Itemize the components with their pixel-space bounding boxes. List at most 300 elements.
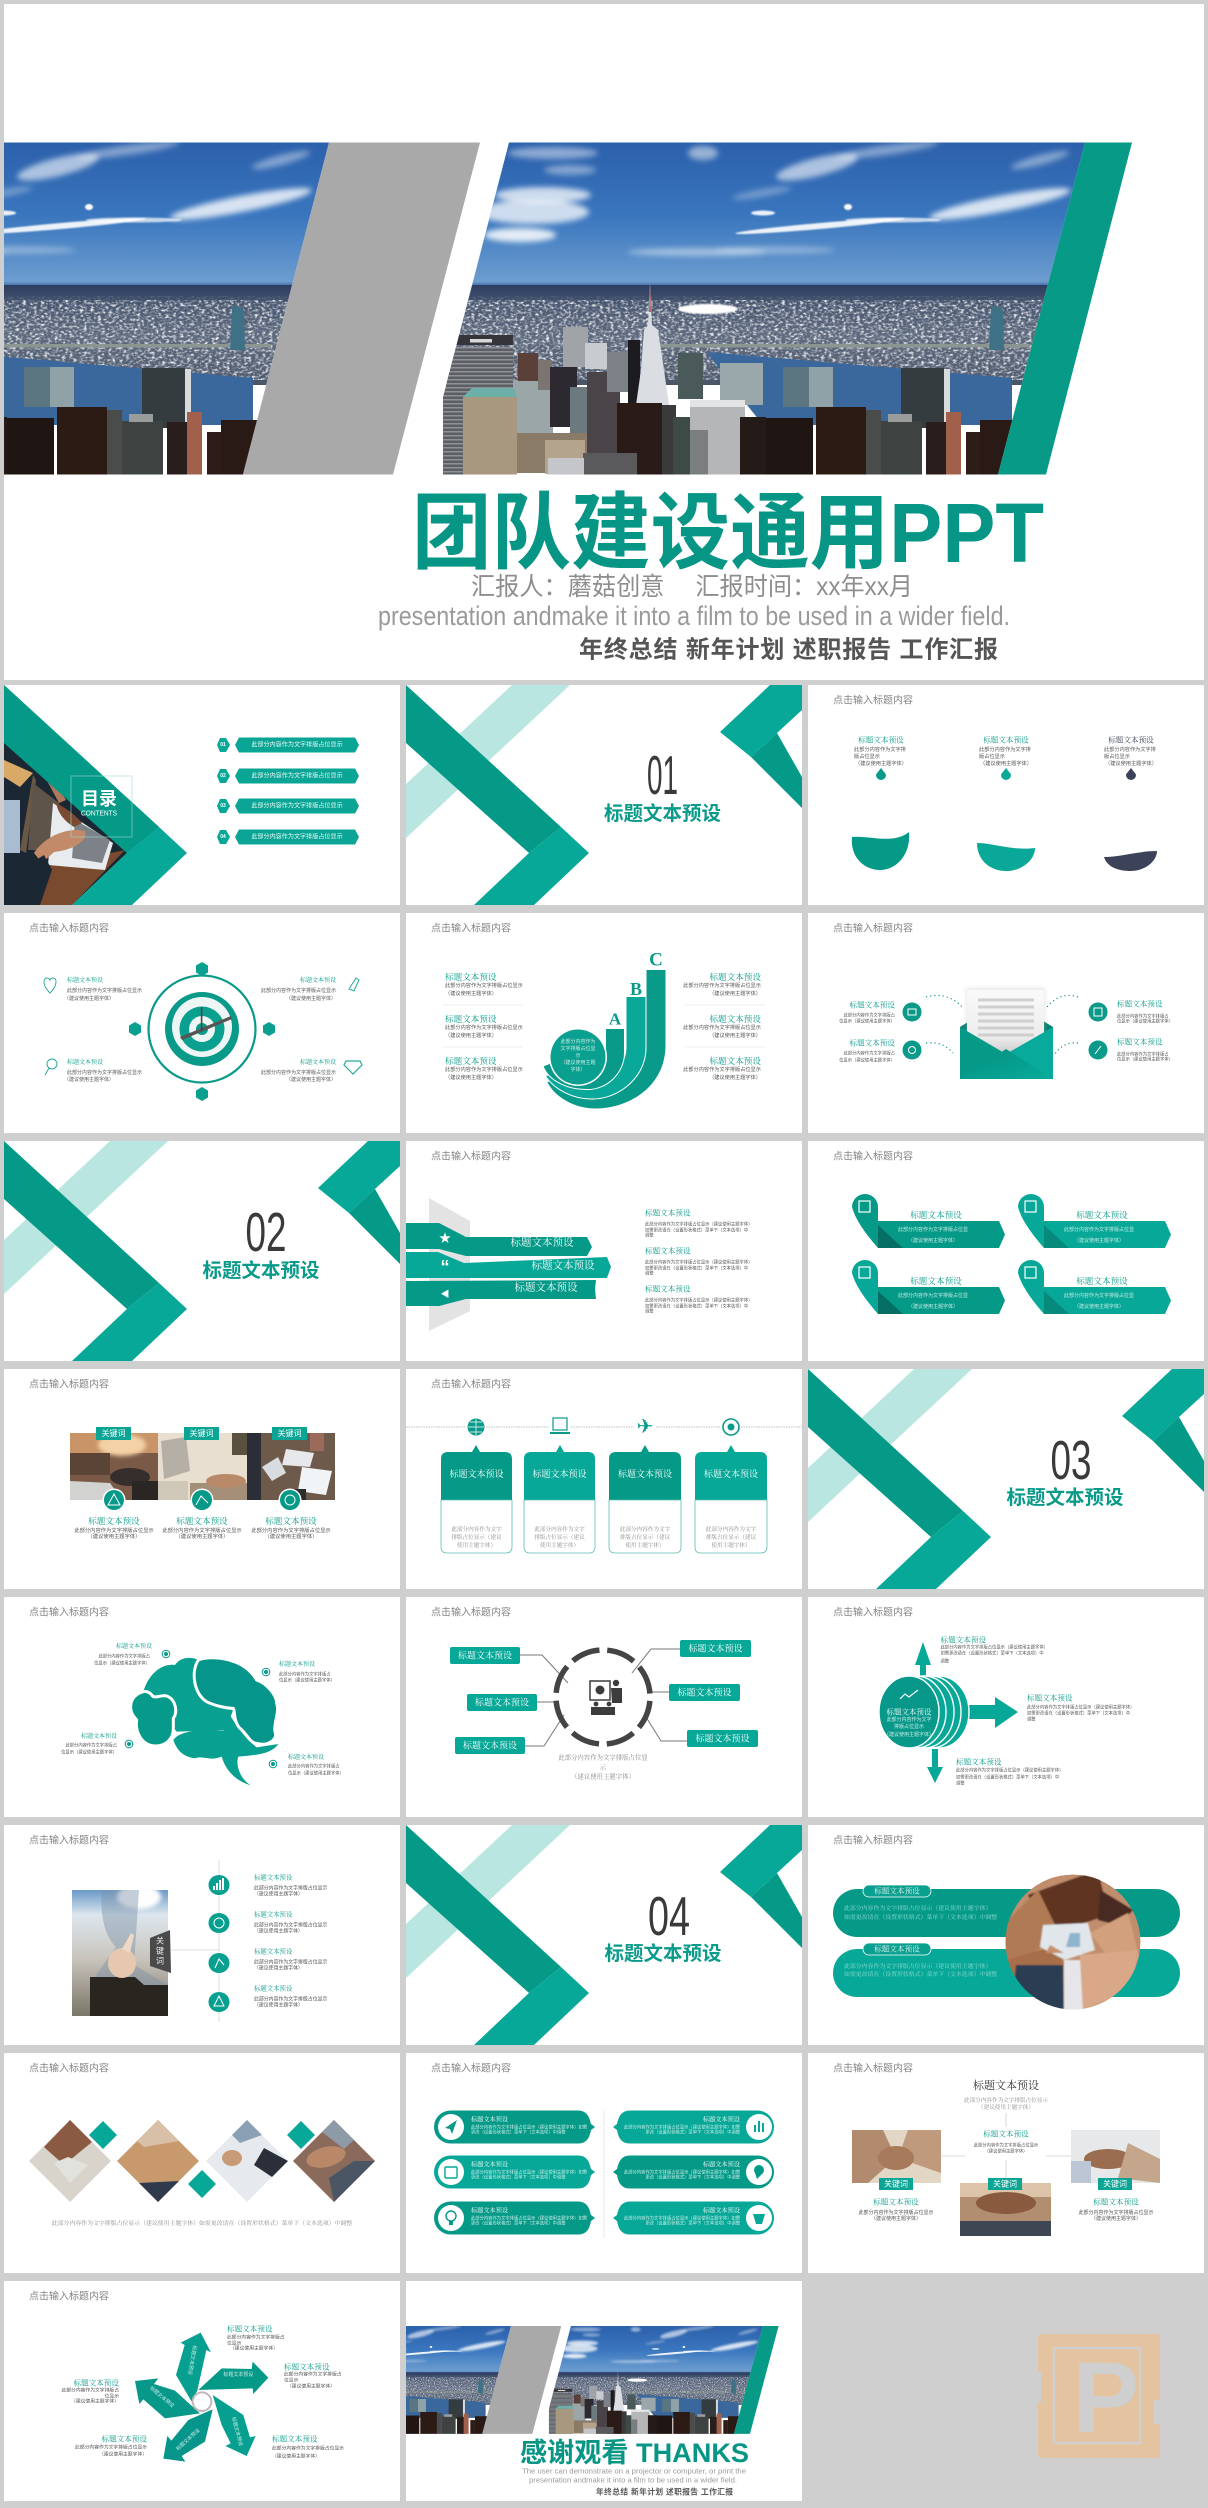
stacked disc: 此部分内容作为文字	[886, 1716, 932, 1723]
top right text	[261, 976, 336, 1002]
right text: 标题文本预设	[1117, 998, 1163, 1008]
label 2: （建议使用主题字体）	[287, 2382, 335, 2390]
timeline icons: ✈	[637, 1416, 653, 1438]
label boxes: 标题文本预设	[688, 1642, 743, 1654]
text bottom: 标题文本预设	[956, 1756, 1002, 1766]
slide title: 点击输入标题内容	[833, 922, 913, 934]
slide title: 点击输入标题内容	[29, 1606, 109, 1618]
english note: presentation andmake it into a film to be used in a wider field.	[529, 2476, 737, 2484]
left pill 2: 更改（设置形状格式）菜单下（文本选项）中调整	[471, 2174, 566, 2180]
timeline icons	[466, 1416, 741, 1438]
keyword tabs: 关键词	[278, 1428, 302, 1438]
left text: 此部分内容作为文字排版占	[843, 1012, 895, 1018]
slide title: 点击输入标题内容	[833, 1150, 913, 1162]
unit bottom left	[852, 1260, 1005, 1314]
caption: 此部分内容作为文字排版占位显示（建议使用主题字体）如需更改请在（设置形状格式）菜单下（文本选项）中调整	[52, 2219, 352, 2227]
chevron background	[4, 1141, 400, 1361]
photo: overhead desk	[247, 1433, 335, 1500]
right pill 3: 此部分内容作为文字排版占位显示（建议使用主题字体）如需	[624, 2214, 741, 2222]
panel: disc with arrows slide	[808, 1597, 1204, 1817]
text top: 此部分内容作为文字排版占位显示（建议使用主题字体）	[940, 1644, 1048, 1650]
left text list: 标题文本预设	[445, 1055, 497, 1066]
arrow bands: “	[440, 1257, 450, 1277]
panel: pin arrows slide	[808, 1141, 1204, 1361]
timeline text: 标题文本预设	[254, 1872, 293, 1882]
contents list: 01	[220, 742, 226, 748]
grey backing	[429, 1198, 470, 1331]
right text: 此部分内容作为文字排版占	[1117, 1050, 1169, 1058]
thanks photo band	[288, 2324, 779, 2434]
right text: 此部分内容作为文字排版占	[1117, 1012, 1169, 1020]
card 4: 使用主题字体）	[711, 1541, 751, 1549]
right text: 调整	[645, 1308, 654, 1314]
envelope	[960, 988, 1053, 1079]
right text list: 此部分内容作为文字排版占位显示	[683, 1065, 761, 1073]
keyword tabs	[879, 2178, 1132, 2190]
label 5	[272, 2434, 344, 2460]
slide title: 点击输入标题内容	[29, 1834, 109, 1846]
chevron background	[808, 1369, 1204, 1589]
text top: 标题文本预设	[940, 1634, 986, 1644]
section number: 01	[647, 744, 678, 806]
label 3	[61, 2378, 119, 2404]
label boxes: 标题文本预设	[677, 1686, 732, 1698]
right pill 1: 标题文本预设	[703, 2116, 741, 2124]
left text list: 标题文本预设	[445, 971, 497, 982]
diamond photo 3	[206, 2120, 288, 2202]
keyword tabs	[96, 1427, 307, 1440]
panel: section 01	[406, 685, 802, 905]
icon: heart	[44, 978, 56, 993]
timeline text: 此部分内容作为文字排版占位显示	[254, 1958, 327, 1966]
card 2	[524, 1445, 595, 1553]
target diagram	[129, 962, 275, 1101]
callout top left: 位显示（建议使用主题字体）	[94, 1660, 150, 1666]
label boxes: 标题文本预设	[695, 1732, 750, 1744]
arrow bands: ◀	[440, 1289, 450, 1299]
bowl shapes	[852, 832, 1157, 871]
section title: 标题文本预设	[604, 1942, 722, 1965]
timeline text: （建议使用主题字体）	[254, 1890, 303, 1898]
column 3 text: 此部分内容作为文字排	[1104, 745, 1156, 753]
circle photo: joined hands	[1003, 1870, 1140, 2012]
panel: cover slide	[0, 4, 1204, 680]
presenter icon	[590, 1680, 622, 1715]
label 3: 位显示	[105, 2392, 119, 2400]
label boxes: 标题文本预设	[475, 1696, 529, 1708]
column 2 text: 此部分内容作为文字排	[979, 745, 1031, 753]
right text list: 此部分内容作为文字排版占位显示	[683, 981, 761, 989]
card 1: 排版占位显示（建议	[451, 1533, 502, 1541]
timeline nodes	[208, 1875, 230, 2012]
panel: vertical timeline slide	[4, 1825, 400, 2045]
small teal diamonds	[89, 2121, 315, 2198]
J-curve chart: 此部分内容作为	[560, 1038, 596, 1045]
keywords line: 年终总结 新年计划 述职报告 工作汇报	[579, 636, 998, 664]
stacked disc: （建议使用主题字体）	[884, 1731, 934, 1738]
left text list: （建议使用主题字体）	[445, 989, 497, 997]
panel: section 03	[808, 1369, 1204, 1589]
captions: （建议使用主题字体）	[176, 1532, 228, 1540]
timeline text: （建议使用主题字体）	[254, 2002, 303, 2008]
contents list: 此部分内容作为文字排版占位显示	[251, 740, 343, 748]
label 1: 标题文本预设	[227, 2324, 273, 2334]
brain diagram	[131, 1658, 278, 1785]
right text: 位显示（建议使用主题字体）	[1117, 1056, 1173, 1062]
callout bottom right: 位显示（建议使用主题字体）	[288, 1770, 344, 1776]
caption: 示	[600, 1764, 607, 1772]
captions	[74, 1515, 331, 1540]
panel: timeline cards slide	[406, 1369, 802, 1589]
left caption	[858, 2196, 934, 2222]
callout bottom right: 标题文本预设	[288, 1753, 324, 1761]
callout bottom right	[269, 1753, 344, 1776]
left pill 1	[434, 2110, 595, 2144]
left pill 1: 标题文本预设	[471, 2116, 509, 2124]
card 1	[441, 1445, 512, 1553]
unit bottom right: 标题文本预设	[1076, 1275, 1128, 1286]
label 1	[227, 2324, 285, 2352]
column 2 text: （建议使用主题字体）	[980, 759, 1032, 767]
label boxes: 标题文本预设	[463, 1740, 517, 1750]
timeline text: 标题文本预设	[254, 1910, 293, 1918]
callout top right: 此部分内容作为文字排版占	[279, 1670, 331, 1678]
top right text: （建议使用主题字体）	[286, 995, 336, 1002]
left text list	[443, 971, 523, 1081]
right text: 标题文本预设	[1117, 1036, 1163, 1046]
text right: 如需更改请在（设置形状格式）菜单下（文本选项）中	[1027, 1710, 1130, 1716]
column 2 text: 版占位显示	[979, 752, 1005, 760]
caption	[558, 1752, 648, 1780]
callout top left: 此部分内容作为文字排版占	[98, 1652, 150, 1660]
card 1: 此部分内容作为文字	[451, 1525, 502, 1533]
text bottom: 如需更改请在（设置形状格式）菜单下（文本选项）中	[956, 1774, 1059, 1780]
keyword tabs: 关键词	[993, 2178, 1017, 2188]
label boxes	[450, 1640, 758, 1754]
timeline text: （建议使用主题字体）	[254, 1964, 303, 1972]
panel: section 04	[406, 1825, 802, 2045]
dotted connector arcs	[926, 995, 1078, 1055]
top pill: 如需更改请在（设置形状格式）菜单下（文本选项）中调整	[844, 1913, 997, 1921]
slide title: 点击输入标题内容	[29, 1378, 109, 1390]
unit top left: （建议使用主题字体）	[908, 1237, 958, 1244]
label 5: 标题文本预设	[272, 2434, 318, 2444]
section number: 03	[1050, 1429, 1092, 1491]
slide title: 点击输入标题内容	[431, 1150, 511, 1162]
right pill 3: 更改（设置形状格式）菜单下（文本选项）中调整	[645, 2220, 741, 2226]
label 2: 位显示	[284, 2376, 299, 2384]
column 3 text: 标题文本预设	[1108, 734, 1154, 744]
timeline text: 标题文本预设	[254, 1984, 293, 1992]
english note: The user can demonstrate on a projector or computer, or print the	[522, 2466, 746, 2476]
column 1 text: 版占位显示	[854, 752, 880, 760]
bottom left text: （建议使用主题字体）	[64, 1076, 114, 1083]
text right	[1027, 1692, 1134, 1722]
panel: thanks slide	[406, 2281, 802, 2501]
pinwheel arrows: 标题文本预设	[175, 2427, 201, 2452]
right text: 标题文本预设	[645, 1246, 691, 1256]
left pill 3	[434, 2202, 595, 2234]
main heading	[964, 2078, 1048, 2111]
left text: 位显示（建议使用主题字体）	[839, 1056, 895, 1064]
label 4: （建议使用主题字体）	[99, 2450, 147, 2458]
right pill 2: 此部分内容作为文字排版占位显示（建议使用主题字体）如需	[624, 2168, 741, 2176]
captions: （建议使用主题字体）	[88, 1532, 140, 1540]
left pill 3: 此部分内容作为文字排版占位显示（建议使用主题字体）如需	[471, 2214, 588, 2222]
bottom right text: 此部分内容作为文字排版占位显示	[261, 1069, 336, 1076]
centre line	[603, 2111, 605, 2238]
callout bottom left: 位显示（建议使用主题字体）	[61, 1748, 117, 1756]
keyword tabs: 关键词	[102, 1428, 126, 1438]
card 4: 排版占位显示（建议	[706, 1533, 757, 1541]
top right text: 标题文本预设	[300, 976, 336, 984]
icon: diamond	[344, 1061, 362, 1074]
panel: three arrows slide	[406, 1141, 802, 1361]
contents photo	[4, 735, 127, 905]
callout top right: 标题文本预设	[279, 1660, 315, 1668]
chevron	[4, 685, 187, 905]
card 2: 排版占位显示（建议	[534, 1533, 585, 1541]
right text: 位显示（建议使用主题字体）	[1117, 1018, 1173, 1024]
top right text: 此部分内容作为文字排版占位显示	[261, 987, 336, 994]
card 2: 标题文本预设	[532, 1468, 587, 1479]
slide title: 点击输入标题内容	[833, 2062, 913, 2074]
card 1: 使用主题字体）	[457, 1541, 496, 1549]
panel: section 02	[4, 1141, 400, 1361]
icon: pen	[349, 978, 359, 991]
unit bottom left: （建议使用主题字体）	[908, 1303, 958, 1310]
column 1 text: （建议使用主题字体）	[855, 759, 907, 767]
column 2 text	[979, 734, 1032, 767]
broken ring	[556, 1650, 650, 1744]
chevron background	[406, 1825, 802, 2045]
english note	[522, 2466, 746, 2484]
slide title: 点击输入标题内容	[29, 2062, 109, 2074]
right caption: 标题文本预设	[1093, 2196, 1139, 2206]
J-curve chart: A	[609, 1010, 622, 1028]
left text list: （建议使用主题字体）	[445, 1031, 497, 1039]
left pill 2	[434, 2156, 595, 2188]
captions: 此部分内容作为文字排版占位显示	[162, 1526, 242, 1534]
right text list: （建议使用主题字体）	[709, 1073, 761, 1081]
unit bottom right: 此部分内容作为文字排版占位显	[1064, 1292, 1134, 1299]
centre text: （建议使用主题字体）	[985, 2148, 1027, 2154]
photo centre	[960, 2183, 1051, 2236]
panel: envelope slide	[808, 913, 1204, 1133]
label 1: （建议使用主题字体）	[230, 2344, 278, 2352]
panel: ring and labels slide	[406, 1597, 802, 1817]
top left text	[64, 976, 142, 1002]
centre text: 标题文本预设	[983, 2128, 1029, 2138]
captions: 标题文本预设	[265, 1515, 317, 1526]
card 2: 使用主题字体）	[540, 1541, 579, 1549]
top pill: 此部分内容作为文字排版占位显示（建议使用主题字体）	[844, 1904, 991, 1912]
stacked disc	[879, 1676, 969, 1748]
column 1 text: 标题文本预设	[858, 734, 904, 744]
right text list	[683, 971, 765, 1081]
timeline text: 此部分内容作为文字排版占位显示	[254, 1922, 327, 1928]
callout bottom left	[61, 1732, 133, 1756]
label 4	[75, 2434, 147, 2458]
column 1 text: 此部分内容作为文字排	[854, 745, 906, 753]
contents label	[71, 776, 132, 837]
top left text: 标题文本预设	[67, 976, 103, 984]
unit bottom right: （建议使用主题字体）	[1074, 1303, 1124, 1310]
contents list: 此部分内容作为文字排版占位显示	[251, 772, 343, 780]
slide title: 点击输入标题内容	[833, 1834, 913, 1846]
right text: 调整	[645, 1232, 654, 1238]
panel: three team photos slide	[808, 2053, 1204, 2273]
drops	[876, 768, 1136, 780]
card 4: 标题文本预设	[704, 1468, 758, 1479]
right caption	[1078, 2196, 1154, 2222]
slide title: 点击输入标题内容	[29, 922, 109, 934]
card 3: 排版占位显示（建议	[620, 1533, 671, 1541]
timeline line	[170, 1860, 219, 2022]
timeline text: 标题文本预设	[254, 1946, 293, 1956]
column 1 text	[854, 734, 907, 767]
slide title: 点击输入标题内容	[431, 1378, 511, 1390]
chevron background	[406, 685, 802, 905]
timeline line	[406, 1426, 802, 1428]
icon: watermark stamp	[1036, 2334, 1160, 2458]
keyword tag: 键	[156, 1946, 164, 1956]
right text: 如需更改请在（设置形状格式）菜单下（文本选项）中	[645, 1302, 748, 1310]
J-curve chart	[549, 950, 663, 1099]
panel: six pills slide	[406, 2053, 802, 2273]
unit top left: 此部分内容作为文字排版占位显	[898, 1226, 968, 1233]
callout bottom left: 标题文本预设	[81, 1732, 117, 1740]
keyword tabs: 关键词	[190, 1428, 214, 1438]
panel: diamonds slide	[4, 2053, 400, 2273]
photo: laptop and pen	[158, 1433, 247, 1500]
text bottom: 调整	[956, 1780, 965, 1786]
card 3: 此部分内容作为文字	[620, 1525, 671, 1533]
left pill 2: 标题文本预设	[471, 2160, 509, 2168]
text bottom: 此部分内容作为文字排版占位显示（建议使用主题字体）	[956, 1766, 1063, 1774]
right pill 1	[613, 2110, 774, 2144]
left text: 位显示（建议使用主题字体）	[839, 1018, 895, 1024]
text top	[940, 1634, 1048, 1664]
left pill 1: 更改（设置形状格式）菜单下（文本选项）中调整	[471, 2128, 566, 2136]
left caption: 标题文本预设	[873, 2196, 919, 2206]
panel: pinwheel slide	[4, 2281, 400, 2501]
section number: 02	[246, 1201, 286, 1263]
label 2: 此部分内容作为文字排版占	[284, 2370, 342, 2378]
panel: three drops slide	[808, 685, 1204, 905]
label 5: 此部分内容作为文字排版占位显示	[272, 2444, 344, 2452]
arrow right	[968, 1697, 1018, 1728]
J-curve chart: C	[649, 950, 663, 970]
right text list: （建议使用主题字体）	[709, 989, 761, 997]
pinwheel arrows: 标题文本预设	[186, 2345, 198, 2375]
contents list: 03	[220, 803, 226, 809]
photo: handshake desk	[70, 1433, 158, 1500]
photo right	[1071, 2130, 1160, 2183]
text right: 调整	[1027, 1716, 1036, 1722]
right pill 1: 此部分内容作为文字排版占位显示（建议使用主题字体）如需	[624, 2124, 741, 2130]
bottom left text: 标题文本预设	[67, 1058, 103, 1066]
right pill 3	[613, 2202, 774, 2234]
label 2: 标题文本预设	[284, 2362, 330, 2372]
left text list: 此部分内容作为文字排版占位显示	[445, 1065, 523, 1073]
text right: 标题文本预设	[1027, 1692, 1073, 1702]
panel: ABC staircase slide	[406, 913, 802, 1133]
timeline text: （建议使用主题字体）	[254, 1928, 303, 1934]
J-curve chart: 示	[575, 1053, 581, 1059]
pinwheel arrows: 标题文本预设	[230, 2416, 244, 2447]
unit bottom right	[1018, 1260, 1171, 1314]
panel: three photos slide	[4, 1369, 400, 1589]
column 2 text: 标题文本预设	[983, 734, 1029, 744]
arrow bands	[406, 1223, 611, 1306]
keyword tabs: 关键词	[884, 2178, 908, 2188]
slide title: 点击输入标题内容	[833, 1606, 913, 1618]
label 1: 此部分内容作为文字排版占	[227, 2334, 285, 2340]
keyword tabs: 关键词	[1103, 2178, 1127, 2188]
label 3: 此部分内容作为文字排版占	[61, 2386, 119, 2394]
connector lines	[941, 2113, 1071, 2183]
card 3: 使用主题字体）	[625, 1541, 665, 1549]
left pill 2: 此部分内容作为文字排版占位显示（建议使用主题字体）如需	[471, 2168, 588, 2176]
text bottom	[956, 1756, 1063, 1786]
contents list	[217, 738, 359, 844]
unit top right	[1018, 1194, 1171, 1248]
right text: 如需更改请在（设置形状格式）菜单下（文本选项）中	[645, 1264, 748, 1272]
right text: 此部分内容作为文字排版占位显示（建议使用主题字体）	[645, 1220, 752, 1228]
bottom pill: 此部分内容作为文字排版占位显示（建议使用主题字体）	[844, 1962, 991, 1970]
arrow bands: 标题文本预设	[514, 1280, 578, 1294]
keyword tag	[150, 1930, 171, 1973]
left text	[839, 1000, 895, 1064]
timeline text	[254, 1872, 327, 2008]
text top: 如需更改请在（设置形状格式）菜单下（文本选项）中	[940, 1650, 1044, 1656]
J-curve chart: （建议使用主题	[560, 1059, 596, 1066]
right text: 调整	[645, 1270, 654, 1276]
bottom left text	[64, 1058, 142, 1083]
contents label: 目录	[81, 789, 117, 809]
right text: 如需更改请在（设置形状格式）菜单下（文本选项）中	[645, 1226, 748, 1234]
section number: 04	[648, 1885, 690, 1947]
panel: target slide	[4, 913, 400, 1133]
english subtitle: presentation andmake it into a film to be used in a wider field.	[378, 601, 1010, 631]
slide title: 点击输入标题内容	[29, 2290, 109, 2302]
caption: 此部分内容作为文字排版占位显	[558, 1752, 648, 1762]
section title: 标题文本预设	[202, 1259, 320, 1282]
contents label: CONTENTS	[81, 810, 117, 818]
right text: 此部分内容作为文字排版占位显示（建议使用主题字体）	[645, 1258, 752, 1266]
top pill	[833, 1889, 1180, 1937]
left pill 3: 更改（设置形状格式）菜单下（文本选项）中调整	[471, 2220, 566, 2226]
label 5: （建议使用主题字体）	[272, 2452, 320, 2460]
bottom right text: 标题文本预设	[300, 1058, 336, 1066]
diamond photo 1	[29, 2120, 111, 2202]
callout top right	[262, 1660, 335, 1684]
left text: 标题文本预设	[849, 1000, 895, 1010]
left text: 标题文本预设	[849, 1038, 895, 1048]
centre text	[974, 2128, 1039, 2154]
J-curve chart: B	[630, 979, 642, 999]
section title: 标题文本预设	[1006, 1486, 1124, 1509]
label 3: （建议使用主题字体）	[71, 2398, 119, 2404]
left text list: 标题文本预设	[445, 1013, 497, 1024]
left pill 3: 标题文本预设	[471, 2206, 509, 2214]
top left text: （建议使用主题字体）	[64, 995, 114, 1002]
arrow up	[915, 1642, 931, 1679]
right pill 3: 标题文本预设	[703, 2206, 741, 2214]
pinwheel arrows: 标题文本预设	[223, 2371, 253, 2378]
captions: 此部分内容作为文字排版占位显示	[74, 1526, 154, 1534]
